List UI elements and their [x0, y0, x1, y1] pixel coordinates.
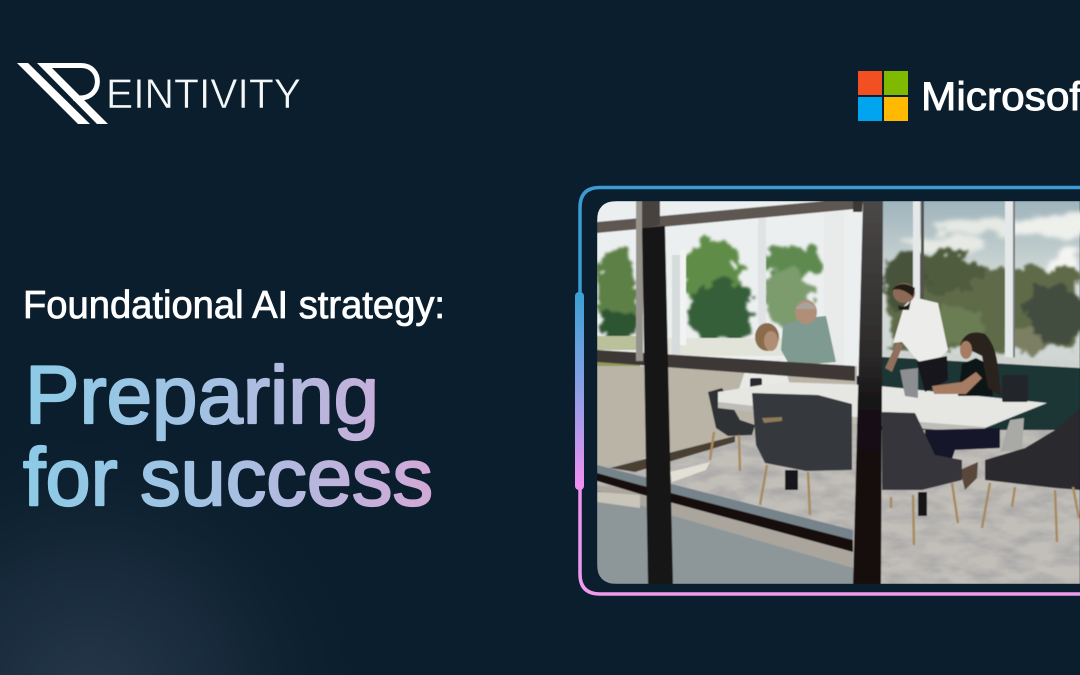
person: seated woman right — [932, 332, 1028, 402]
under-table legs — [925, 418, 1024, 490]
icon: R mark — [17, 63, 108, 124]
windows and exterior — [597, 201, 1080, 376]
door frame: vertical posts — [636, 201, 883, 584]
wordmark: Microsoft — [921, 75, 1080, 119]
title: for success — [23, 432, 433, 523]
title — [23, 350, 433, 523]
wordmark: EINTIVITY — [106, 70, 301, 117]
person: seated woman left — [739, 322, 790, 389]
door frame: horizontal mullions — [597, 201, 855, 552]
chair behind table — [708, 388, 755, 471]
wall and floor — [597, 350, 1080, 584]
table — [718, 382, 1047, 433]
subtitle: Foundational AI strategy: — [23, 284, 445, 327]
title: Preparing — [25, 350, 379, 441]
gradient frame — [575, 188, 1080, 594]
photo: team meeting in glass room — [597, 201, 1080, 584]
person: standing man — [885, 283, 948, 398]
front chairs — [752, 393, 1080, 545]
logo: Microsoft — [858, 71, 1080, 121]
icon: Microsoft squares — [858, 71, 908, 121]
logo: Reintivity — [17, 63, 301, 124]
person: older man leaning — [781, 300, 836, 366]
